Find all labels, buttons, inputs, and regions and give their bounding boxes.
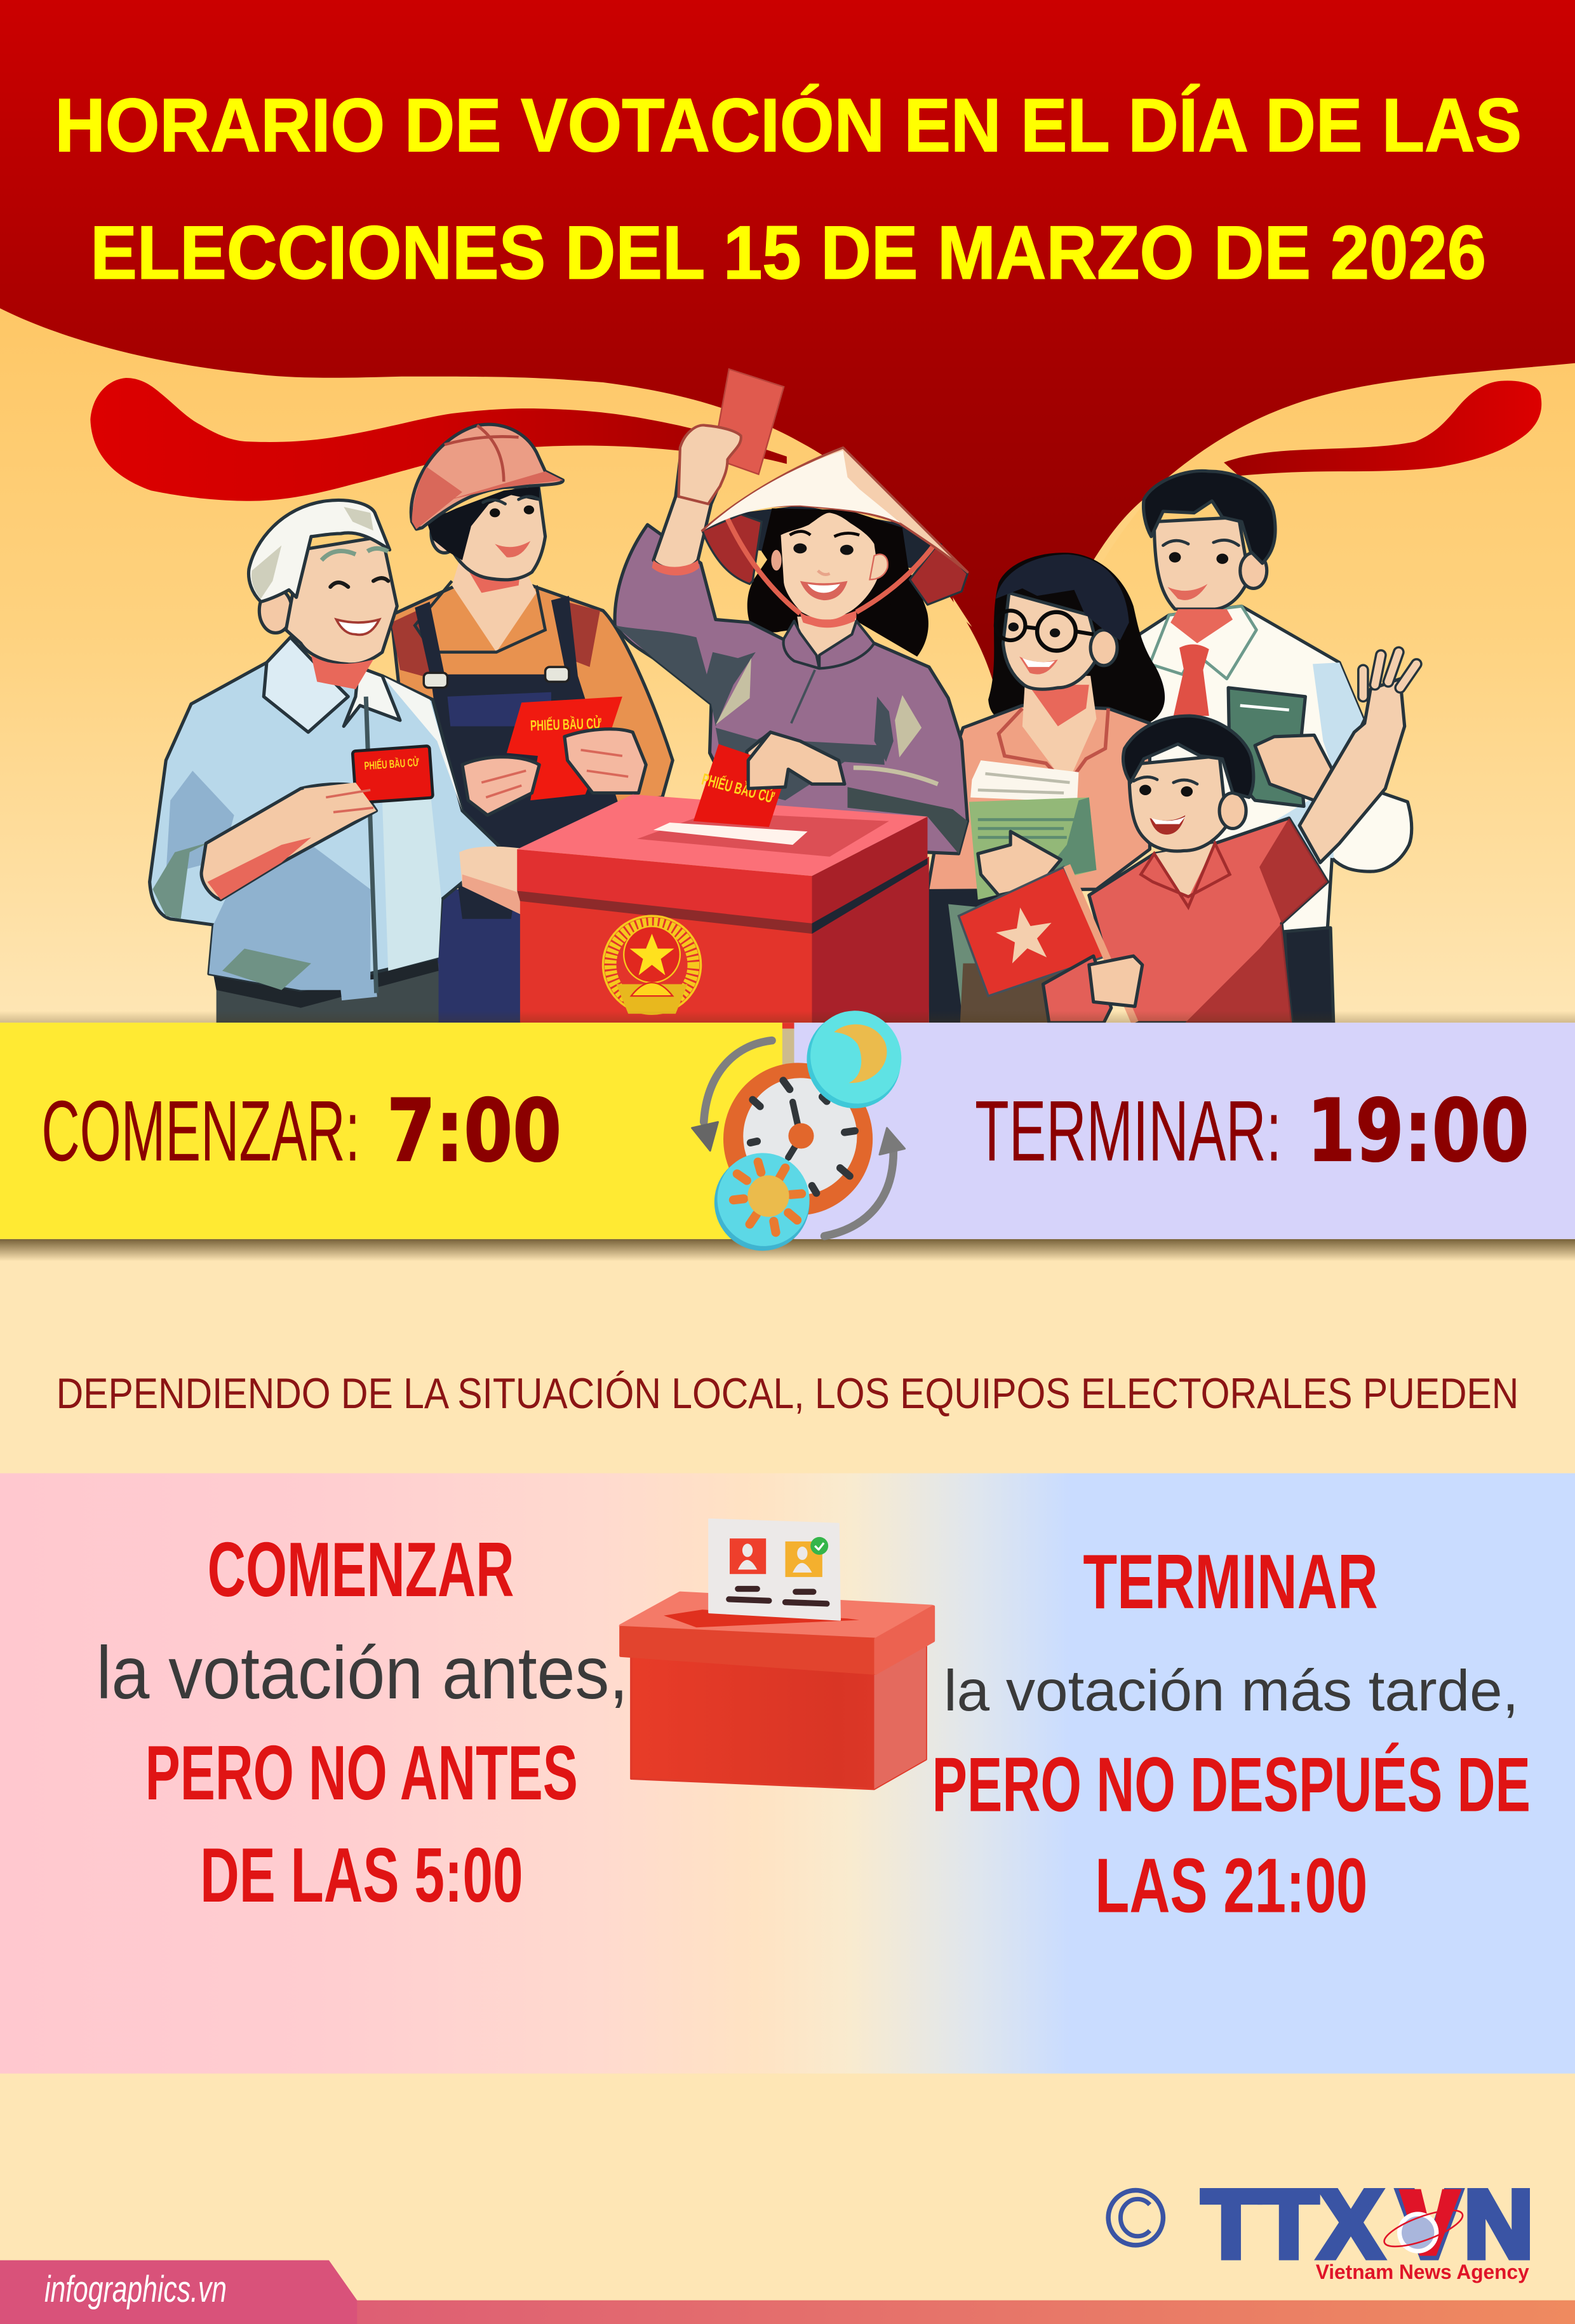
footer site tab: infographics.vn xyxy=(44,2269,227,2310)
left text block: start: DE LAS 5:00 xyxy=(200,1832,523,1918)
hat straps xyxy=(728,519,935,614)
raised forearm xyxy=(653,459,723,569)
forearm and hand with red card xyxy=(201,746,433,899)
ballot going into slot xyxy=(694,744,788,827)
footer site tab xyxy=(0,2260,357,2324)
moon badge xyxy=(791,996,916,1124)
hat underside xyxy=(741,506,942,570)
icon: clock with sun and moon xyxy=(692,996,916,1266)
gradient info band xyxy=(0,1474,1575,2074)
arrow: clockwise xyxy=(824,1128,905,1236)
figure: elderly man in blue shirt xyxy=(150,500,537,1023)
ballot box with emblem xyxy=(517,732,929,1023)
ballot held by worker: PHIẾU BẦU CỬ xyxy=(530,714,602,734)
TTXVN logo: Vietnam News Agency xyxy=(1316,2260,1529,2283)
end time bar xyxy=(794,1023,1575,1239)
title: ELECCIONES DEL 15 DE MARZO DE 2026 xyxy=(90,211,1486,295)
left text block: start: COMENZAR xyxy=(208,1526,514,1613)
clock face xyxy=(723,1063,873,1215)
title xyxy=(55,83,1522,295)
Vietnamese flag xyxy=(958,866,1135,1023)
start time bar: 7:00 xyxy=(387,1080,561,1181)
ballot going into slot: PHIẾU BẦU CỬ xyxy=(700,769,777,807)
papers and green book xyxy=(969,760,1096,899)
start time bar: COMENZAR: xyxy=(41,1082,360,1179)
hair xyxy=(761,508,908,608)
hand over ballot xyxy=(748,732,845,788)
copyright symbol xyxy=(1108,2191,1163,2245)
conical hat xyxy=(702,448,967,572)
right text block: end: LAS 21:00 xyxy=(1095,1842,1367,1928)
right text block: end: TERMINAR xyxy=(1083,1538,1378,1625)
end time bar: 19:00 xyxy=(1307,1080,1529,1181)
ears and face xyxy=(771,550,782,570)
neck xyxy=(797,617,856,657)
ballot held by worker xyxy=(507,697,622,800)
forearm and hand with red card: PHIẾU BẦU CỬ xyxy=(364,755,420,772)
end time bar: TERMINAR: xyxy=(975,1082,1282,1179)
left text block: start: la votación antes, xyxy=(97,1631,628,1714)
waving hand fingers xyxy=(1363,652,1416,697)
right text block: end: la votación más tarde, xyxy=(944,1659,1518,1723)
right text block: end xyxy=(932,1538,1531,1928)
sun badge xyxy=(699,1138,825,1266)
TTXVN logo: TTXVN xyxy=(1202,2171,1534,2278)
back hair xyxy=(747,511,928,657)
raised ballot xyxy=(713,369,784,474)
left red ribbon xyxy=(90,378,787,501)
left text block: start: PERO NO ANTES xyxy=(145,1730,578,1816)
hand placing ballot xyxy=(747,732,845,788)
figure: man in white shirt xyxy=(1139,471,1412,1023)
red header banner xyxy=(0,0,1575,711)
start time bar xyxy=(0,1011,1575,1261)
icon: red ballot box with ballot xyxy=(621,1519,934,1789)
figure: woman with glasses xyxy=(927,553,1165,1023)
arrow: counterclockwise xyxy=(692,1040,772,1151)
figure: worker with helmet xyxy=(391,424,673,1023)
raised fist xyxy=(679,425,741,504)
right red ribbon xyxy=(1224,380,1541,476)
thin gold slivers in the header tail xyxy=(953,492,1153,627)
figure: boy with flag xyxy=(958,652,1416,1023)
left text block: start xyxy=(97,1526,628,1918)
footer band xyxy=(0,2300,1575,2324)
collar xyxy=(784,621,874,668)
figure: woman in purple with conical hat xyxy=(615,369,967,854)
purple blouse xyxy=(615,525,967,854)
state emblem xyxy=(603,916,701,1014)
